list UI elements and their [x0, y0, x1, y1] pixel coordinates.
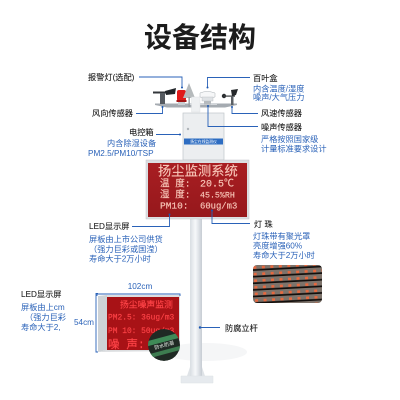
- callout: anti-corrosion pole: [199, 323, 258, 333]
- dimension: height: 54cm: [74, 318, 94, 327]
- callout: alarm light: [88, 72, 183, 88]
- icon: wind direction sensor: [153, 88, 176, 104]
- callout: lamp beads: [211, 210, 315, 260]
- icon: noise sensor tube: [192, 97, 200, 112]
- electric control box: 扬尘在线监测仪: [190, 139, 217, 144]
- icon: alarm light: [176, 90, 186, 105]
- callout: noise sensor: 计量标准要求设计: [261, 144, 327, 154]
- LED note lower left: [21, 290, 66, 332]
- LED display: 温 度:: [160, 178, 190, 190]
- callout: control box: 电控箱: [129, 127, 154, 137]
- callout: alarm light: 报警灯(选配): [88, 72, 135, 82]
- icon: wind speed sensor: [222, 89, 238, 105]
- LED note lower left: （强力巨彩: [25, 312, 66, 322]
- callout: wind speed sensor: 风速传感器: [261, 108, 302, 118]
- circuit board loupe: 防水防潮: [154, 340, 175, 351]
- callout: louver box: 噪声/大气压力: [253, 92, 304, 102]
- dimension: width: 102cm: [128, 282, 152, 291]
- LED display: [146, 160, 249, 219]
- LED display: 扬尘监测系统: [158, 164, 238, 180]
- LED panel photo with dimensions: [98, 295, 182, 361]
- icon: louver box: [200, 92, 215, 104]
- electric control box: [183, 113, 224, 160]
- dimension: width: [97, 282, 180, 296]
- callout: louver box: 百叶盒: [253, 73, 278, 83]
- icon: lightning rod cone: [183, 83, 195, 107]
- monitoring pole: [163, 155, 247, 383]
- callout: LED display: LED显示屏: [89, 222, 130, 231]
- callout: louver box: 内含温度/湿度: [253, 84, 304, 94]
- title: 设备结构: [144, 22, 256, 53]
- LED note lower left: 屏板由上cm: [21, 302, 65, 312]
- LED panel photo with dimensions: 噪 声:: [108, 337, 145, 352]
- callout: wind direction sensor: [92, 106, 164, 118]
- callout: wind speed sensor: [231, 106, 302, 118]
- callout: noise sensor: [207, 105, 327, 154]
- callout: noise sensor: 噪声传感器: [261, 122, 302, 132]
- callout: lamp beads: 亮度增强60%: [253, 240, 302, 250]
- LED note lower left: 寿命大于2,: [21, 322, 61, 332]
- LED note lower left: LED显示屏: [21, 290, 62, 299]
- callout: LED display: （强力巨彩或国滢）: [89, 244, 163, 254]
- callout: LED display: 屏板由上市公司供货: [89, 234, 163, 244]
- LED display: 60ug/m3: [200, 202, 237, 212]
- LED display: PM10:: [160, 200, 189, 212]
- callout: LED display: [89, 214, 170, 264]
- LED panel photo with dimensions: PM2.5: 36ug/m3: [108, 314, 175, 322]
- dimension: height: [74, 294, 98, 352]
- LED display: 45.5%RH: [200, 192, 235, 200]
- LED display: 湿 度:: [160, 188, 190, 200]
- LED panel photo with dimensions: 扬尘噪声监测: [120, 298, 173, 310]
- callout: control box: 内含除湿设备: [107, 138, 156, 148]
- callout: control box: [88, 127, 181, 158]
- callout: lamp beads: 灯珠带有聚光罩: [253, 231, 310, 241]
- callout: LED display: 寿命大于2万小时: [89, 254, 151, 264]
- LED display: 20.5℃: [200, 178, 234, 190]
- LED panel photo with dimensions: PM 10: 50ug/m3: [108, 327, 175, 336]
- callout: anti-corrosion pole: 防腐立杆: [225, 323, 258, 333]
- lamp beads photo: [253, 265, 322, 303]
- callout: wind direction sensor: 风向传感器: [92, 108, 133, 118]
- sensor crossarm: [155, 103, 237, 108]
- callout: noise sensor: 严格按照国家级: [261, 134, 318, 144]
- callout: lamp beads: 寿命大于2万小时: [253, 250, 315, 260]
- callout: lamp beads: 灯 珠: [254, 219, 273, 229]
- callout: control box: PM2.5/PM10/TSP: [88, 149, 154, 158]
- callout: louver box: [206, 73, 304, 102]
